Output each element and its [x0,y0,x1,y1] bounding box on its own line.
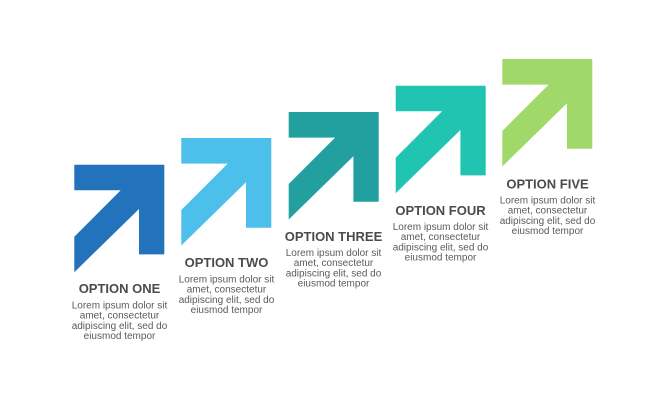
text block: option three: eiusmod tempor [298,279,370,290]
panel: option one [72,165,168,342]
text block: option three: adipiscing elit, sed do [286,268,382,280]
panel: option three [285,112,383,290]
heading: option five: OPTION FIVE [506,176,589,192]
heading: option one: OPTION ONE [79,281,161,296]
text block: option two: eiusmod tempor [191,305,263,316]
panel: option four [393,86,489,264]
heading: option two: OPTION TWO [185,255,268,270]
icon: arrow four [396,86,486,193]
text block: option three: Lorem ipsum dolor sit [286,248,382,259]
icon: arrow two [181,138,271,246]
text block: option two: adipiscing elit, sed do [179,295,275,306]
text block: option one: eiusmod tempor [84,331,156,342]
text block: option four: amet, consectetur [401,232,481,243]
text block: option four: Lorem ipsum dolor sit [393,222,489,233]
icon: arrow five [502,59,592,166]
text block: option five: adipiscing elit, sed do [500,216,596,227]
text block: option one: adipiscing elit, sed do [72,321,168,332]
heading: option four: OPTION FOUR [395,203,486,218]
icon: arrow one [74,165,164,272]
text block: option five: Lorem ipsum dolor sit [500,196,596,206]
text block: option three: amet, consectetur [294,258,374,269]
icon: arrow three [289,112,379,220]
text block: option one: amet, consectetur [80,311,160,322]
panel: option two [179,138,275,316]
text block: option five: amet, consectetur [508,206,588,217]
panel: option five [500,59,596,237]
text block: option two: Lorem ipsum dolor sit [179,274,275,286]
heading: option three: OPTION THREE [285,229,383,244]
text block: option four: adipiscing elit, sed do [393,242,489,254]
text block: option five: eiusmod tempor [512,226,584,237]
text block: option one: Lorem ipsum dolor sit [72,300,168,312]
text block: option four: eiusmod tempor [405,253,477,264]
text block: option two: amet, consectetur [187,285,267,296]
